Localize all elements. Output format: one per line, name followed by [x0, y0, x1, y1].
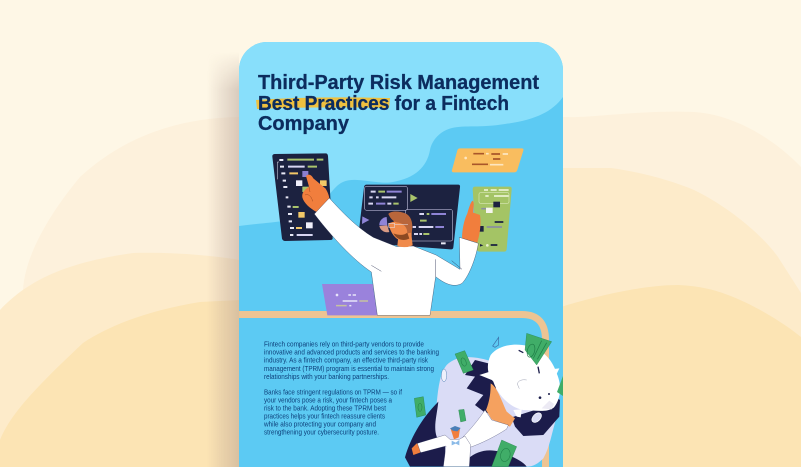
hair — [388, 211, 412, 233]
body text: your vendors pose a risk, your fintech poses a — [264, 396, 393, 405]
body text: industry. As a fintech company, an effective third-party risk — [264, 356, 428, 365]
right hand — [462, 201, 481, 243]
screen: yellow panel — [452, 148, 523, 172]
screen: middle dark panel — [358, 185, 460, 249]
body text: innovative and advanced products and services to the banking — [264, 348, 439, 357]
tan frame bar — [239, 314, 546, 467]
neck and face — [388, 219, 413, 247]
body text: while also protecting your company and — [263, 420, 376, 429]
body text: practices helps your fintech reassure clients — [264, 412, 385, 421]
panel: infographic card — [239, 42, 563, 467]
dark navy burst — [405, 360, 560, 467]
glasses — [389, 223, 408, 227]
illustration: piggy bank and money — [405, 333, 560, 467]
body text: Banks face stringent regulations on TPRM — so if — [264, 388, 403, 396]
small person — [412, 426, 471, 467]
green note at right edge — [557, 376, 563, 396]
screen: purple laptop panel — [322, 284, 377, 315]
title — [256, 72, 539, 135]
body text: relationships with your banking partnerships. — [264, 372, 389, 381]
title: Company — [258, 113, 350, 135]
coins — [493, 337, 499, 347]
illustration: person with screens — [272, 148, 523, 315]
body text: strengthening your cybersecurity posture. — [264, 428, 379, 437]
body text: Fintech companies rely on third-party vendors to provide — [264, 340, 424, 348]
piggy bank — [479, 345, 560, 417]
card shadow — [212, 58, 239, 467]
person — [302, 175, 481, 315]
banknotes — [414, 333, 552, 467]
screen: left dark code panel — [272, 153, 333, 241]
orange arm — [486, 383, 515, 427]
title: Third-Party Risk Management — [258, 72, 539, 94]
body text: management (TPRM) program is essential to maintain strong — [264, 364, 434, 373]
body text — [263, 340, 439, 437]
lavender blob — [433, 357, 557, 467]
screen: green panel — [473, 187, 512, 252]
highlight stroke — [256, 97, 390, 109]
left hand — [302, 175, 329, 212]
body text: risk to the bank. Adopting these TPRM best — [264, 404, 386, 413]
beard — [393, 233, 409, 240]
white sleeve — [462, 410, 508, 447]
shirt — [314, 198, 478, 315]
title: Best Practices for a Fintech — [258, 93, 509, 115]
cloud background — [239, 42, 563, 226]
